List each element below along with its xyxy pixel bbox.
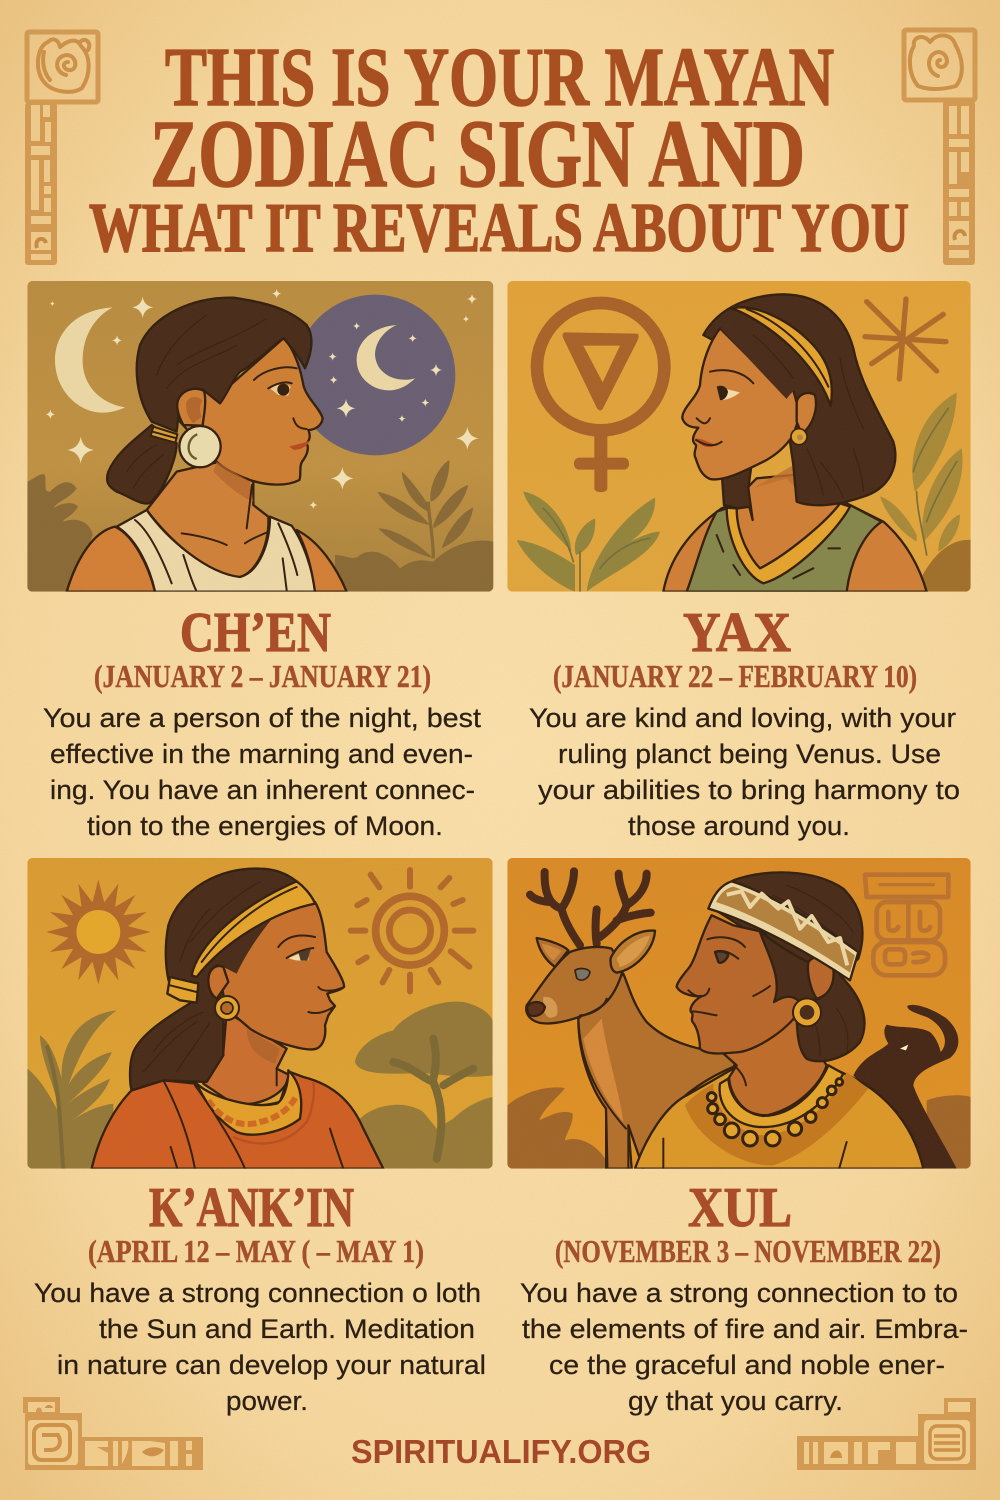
leaves right bbox=[880, 392, 971, 592]
figure bbox=[635, 872, 923, 1169]
description: You are a person of the night, best bbox=[43, 703, 482, 733]
description: power. bbox=[226, 1386, 308, 1416]
ornament: top left glyph column bbox=[25, 32, 98, 265]
icon: deer bbox=[526, 871, 737, 1169]
icon: star burst bbox=[865, 299, 946, 379]
panel: Xul illustration bbox=[507, 858, 971, 1169]
icon: night sky disc with moon bbox=[295, 295, 455, 455]
card: Xul text bbox=[520, 1177, 968, 1416]
panel: K'ank'in illustration bbox=[27, 858, 493, 1169]
icon: ring sun bbox=[351, 870, 473, 991]
figure bbox=[92, 869, 383, 1169]
card: Yax text bbox=[529, 602, 960, 841]
description: the Sun and Earth. Meditation bbox=[99, 1314, 475, 1344]
description: ce the graceful and noble ener- bbox=[549, 1350, 945, 1380]
ornament: bottom left glyph bbox=[23, 1397, 203, 1470]
icon: Venus symbol bbox=[537, 303, 664, 492]
title: ZODIAC SIGN AND bbox=[150, 100, 805, 207]
icon: black cat bbox=[853, 1005, 958, 1169]
description: effective in the marning and even- bbox=[50, 739, 473, 769]
description: gy that you carry. bbox=[628, 1386, 843, 1416]
description: You are kind and loving, with your bbox=[529, 703, 956, 733]
description: ing. You have an inherent connec- bbox=[50, 775, 475, 805]
dates: (JANUARY 2 – JANUARY 21) bbox=[94, 658, 431, 694]
description: the elements of fire and air. Embra- bbox=[522, 1314, 968, 1344]
description: You have a strong connection to to bbox=[520, 1278, 958, 1308]
description bbox=[34, 1278, 486, 1416]
description: those around you. bbox=[628, 811, 850, 841]
heading: K’ANK’IN bbox=[149, 1177, 354, 1239]
dates: (APRIL 12 – MAY ( – MAY 1) bbox=[88, 1233, 424, 1269]
bushes bbox=[507, 1087, 971, 1169]
panel: Ch'en illustration bbox=[27, 281, 493, 592]
description: ruling planct being Venus. Use bbox=[558, 739, 941, 769]
ornament: top right glyph column bbox=[904, 30, 975, 265]
description bbox=[520, 1278, 968, 1416]
icon: Maya glyph bbox=[865, 875, 948, 975]
heading: CH’EN bbox=[180, 602, 331, 664]
description bbox=[529, 703, 960, 841]
footer: site name: SPIRITUALIFY.ORG bbox=[351, 1433, 651, 1470]
icon: crescent moon bbox=[55, 307, 125, 413]
description: You have a strong connection o loth bbox=[34, 1278, 481, 1308]
foliage bbox=[27, 460, 493, 592]
figure bbox=[67, 298, 347, 592]
description bbox=[43, 703, 482, 841]
heading: XUL bbox=[688, 1177, 792, 1239]
plants and tree bbox=[27, 1002, 493, 1169]
description: in nature can develop your natural bbox=[57, 1350, 486, 1380]
icon: spiked sun bbox=[46, 880, 151, 984]
card: Ch'en text bbox=[43, 602, 482, 841]
leaves left bbox=[517, 492, 660, 592]
figure bbox=[663, 294, 927, 592]
heading: YAX bbox=[683, 602, 791, 664]
ornament: bottom right glyph bbox=[797, 1398, 976, 1470]
stars bbox=[46, 289, 479, 509]
card: K'ank'in text bbox=[34, 1177, 486, 1416]
description: tion to the energies of Moon. bbox=[87, 811, 443, 841]
panel: Yax illustration bbox=[507, 281, 971, 592]
title bbox=[89, 31, 909, 267]
description: your abilities to bring harmony to bbox=[538, 775, 960, 805]
